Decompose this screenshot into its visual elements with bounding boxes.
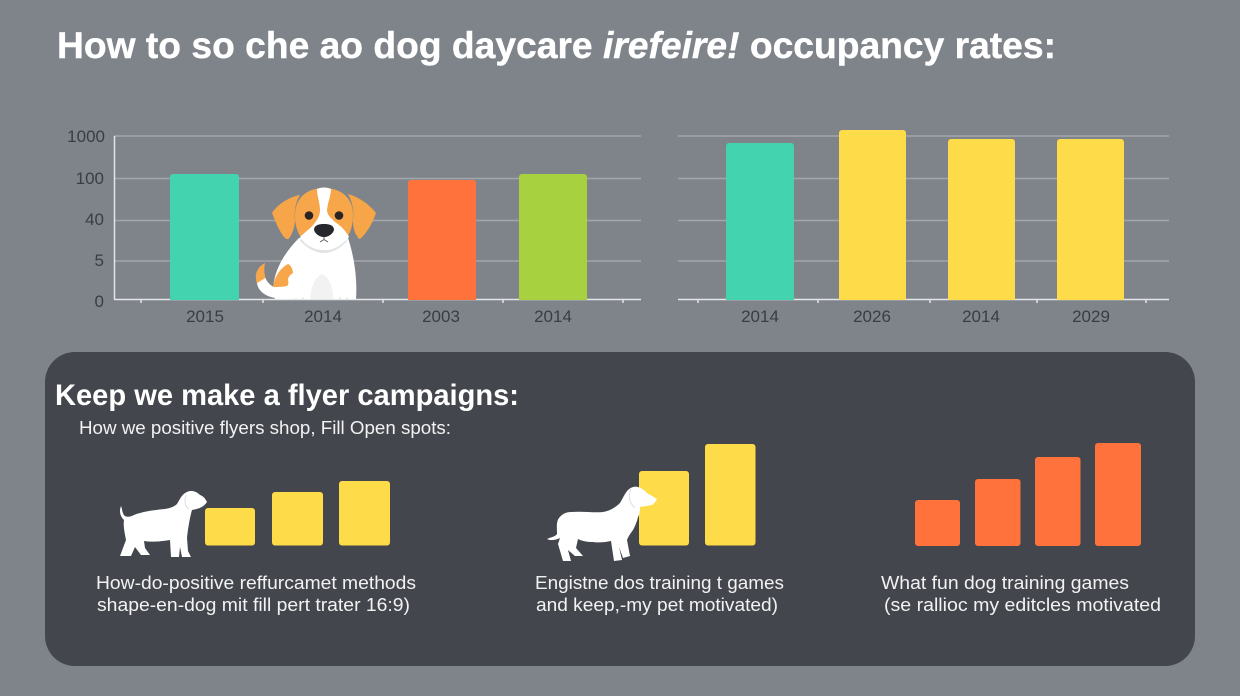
column 3: (se rallioc my editcles motivated	[884, 595, 1161, 615]
panel: flyer campaigns	[45, 352, 1195, 666]
panel subheading: How we positive flyers shop, Fill Open spots:	[79, 418, 451, 438]
x axis labels: 2029	[1072, 307, 1110, 326]
column 2	[535, 444, 784, 615]
yellow bars	[639, 444, 756, 546]
y axis labels: 5	[95, 251, 104, 270]
icon: white dog	[547, 487, 657, 561]
x axis labels: 2014	[304, 307, 342, 326]
x axis labels	[186, 307, 572, 326]
paws	[296, 297, 347, 300]
column 1	[96, 481, 416, 615]
x axis labels: 2026	[853, 307, 891, 326]
right bar chart	[678, 130, 1169, 326]
x axis labels: 2015	[186, 307, 224, 326]
dog ear	[185, 495, 189, 509]
y axis labels	[67, 127, 105, 311]
dog ear	[629, 489, 635, 508]
x axis labels	[741, 307, 1110, 326]
y axis labels: 0	[95, 292, 104, 311]
y axis labels: 1000	[67, 127, 105, 146]
orange bars	[915, 443, 1141, 546]
eyes	[305, 211, 313, 220]
x axis labels: 2014	[741, 307, 779, 326]
x axis labels: 2014	[534, 307, 572, 326]
collar	[300, 238, 347, 253]
bars	[170, 174, 239, 300]
column 2: and keep,-my pet motivated)	[536, 595, 778, 615]
y axis labels: 40	[85, 210, 104, 229]
nose	[314, 224, 334, 237]
x axis labels: 2003	[422, 307, 460, 326]
icon: puppy	[256, 188, 376, 300]
blaze and muzzle	[300, 188, 349, 250]
caption: What fun dog training games	[881, 573, 1129, 593]
mouth	[320, 237, 328, 242]
head	[295, 188, 353, 250]
right ear	[348, 194, 376, 239]
caption: Engistne dos training t games	[535, 573, 784, 593]
icon: white dog	[120, 491, 207, 557]
left bar chart	[67, 127, 641, 326]
left ear	[272, 195, 300, 239]
caption: How-do-positive reffurcamet methods	[96, 573, 416, 593]
title: How to so che ao dog daycare irefeire! occupancy rates:	[57, 25, 1056, 66]
chest shading	[310, 274, 333, 299]
yellow bars	[205, 481, 390, 546]
panel heading: Keep we make a flyer campaigns:	[55, 379, 519, 412]
bars	[726, 143, 794, 300]
column 1: shape-en-dog mit fill pert trater 16:9)	[97, 595, 410, 615]
x axis labels: 2014	[962, 307, 1000, 326]
tail	[256, 263, 266, 284]
y axis labels: 100	[76, 169, 104, 188]
body	[273, 238, 356, 299]
body patch	[273, 264, 293, 287]
column 3	[881, 443, 1161, 615]
